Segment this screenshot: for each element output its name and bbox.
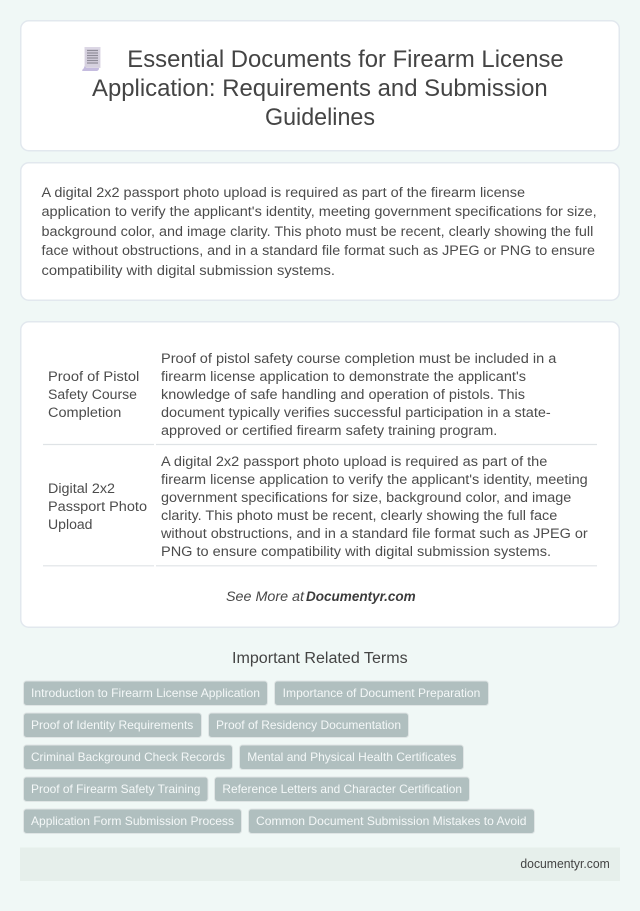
text block: introduction paragraph: A digital 2x2 passport photo upload is required as part of the firearm license	[42, 184, 525, 200]
related terms tags	[24, 681, 534, 834]
row label: pistol safety course	[48, 368, 139, 420]
tag: reference letters: Reference Letters and Character Certification	[222, 782, 462, 796]
heading: Application: Requirements and Submission	[92, 76, 548, 102]
icon: document scroll	[82, 47, 100, 71]
panel: introduction	[21, 163, 619, 300]
text block: introduction paragraph	[42, 184, 597, 278]
row label: pistol safety course: Completion	[48, 404, 121, 420]
tag: introduction: Introduction to Firearm License Application	[31, 686, 260, 700]
tag: residency	[208, 713, 408, 738]
tag: introduction	[24, 681, 268, 706]
footer	[20, 848, 620, 881]
row description: passport photo: A digital 2x2 passport photo upload is required as part of the	[161, 453, 547, 469]
row description: pistol safety course: document typically verifies successful participation in a state-	[161, 404, 551, 420]
tag: importance	[274, 681, 488, 706]
row description: passport photo: government specifications for size, background color, and image	[161, 489, 571, 505]
row description: pistol safety course: knowledge of safe handling and operation of pistols. This	[161, 386, 525, 402]
row description: passport photo: clarity. This photo must be recent, clearly showing the full face	[161, 507, 557, 523]
row description: pistol safety course: Proof of pistol safety course completion must be included in a	[161, 350, 556, 366]
text block: introduction paragraph: compatibility with digital submission systems.	[42, 262, 335, 278]
text block: introduction paragraph: application to verify the applicant's identity, meeting government specifications for size,	[42, 203, 597, 219]
tag: reference letters	[214, 777, 470, 802]
tag: safety training	[24, 777, 208, 802]
table row: passport photo	[43, 453, 597, 566]
row description: passport photo	[160, 453, 588, 559]
row description: pistol safety course: approved or certified firearm safety training program.	[161, 422, 497, 438]
tag: health certificates: Mental and Physical Health Certificates	[247, 750, 456, 764]
see more link: Documentyr.com	[306, 588, 416, 604]
row description: passport photo: firearm license application to verify the applicant's identity, meeting	[161, 471, 588, 487]
tag: background check	[24, 745, 232, 770]
row label: pistol safety course: Proof of Pistol	[48, 368, 139, 384]
row description: passport photo: PNG to ensure compatibility with digital submission systems.	[161, 543, 551, 559]
tag: health certificates	[240, 745, 464, 770]
tag: application form	[24, 809, 242, 834]
text block: introduction paragraph: background color, and image clarity. This photo must be recent, clearly showing the full	[42, 223, 593, 239]
row description: pistol safety course	[161, 350, 556, 438]
text block: introduction paragraph: face without obstructions, and in a standard file format such as JPEG or PNG to ensure	[42, 242, 595, 258]
tag: residency: Proof of Residency Documentation	[216, 718, 401, 732]
see more link	[226, 588, 416, 604]
heading	[92, 47, 564, 131]
heading: Guidelines	[265, 105, 375, 131]
heading: Essential Documents for Firearm License	[127, 47, 564, 73]
footer: documentyr.com	[520, 857, 610, 871]
tag: application form: Application Form Submission Process	[31, 814, 234, 828]
tag: safety training: Proof of Firearm Safety Training	[31, 782, 200, 796]
tag: background check: Criminal Background Check Records	[31, 750, 225, 764]
heading: important related terms: Important Related Terms	[232, 650, 408, 667]
table row: pistol safety course	[43, 350, 597, 444]
tag: common mistakes	[248, 809, 534, 834]
row label: passport photo: Digital 2x2	[48, 480, 115, 496]
row label: passport photo: Passport Photo	[48, 498, 147, 514]
row label: passport photo	[48, 480, 147, 532]
panel: title	[21, 21, 619, 151]
tag: identity	[24, 713, 202, 738]
row description: passport photo: without obstructions, and in a standard file format such as JPEG or	[160, 525, 588, 541]
row description: pistol safety course: firearm license application to demonstrate the applicant's	[161, 368, 526, 384]
see more link: See More at	[226, 588, 305, 604]
tag: common mistakes: Common Document Submission Mistakes to Avoid	[256, 814, 526, 828]
tag: identity: Proof of Identity Requirements	[31, 718, 193, 732]
row label: passport photo: Upload	[48, 516, 92, 532]
row label: pistol safety course: Safety Course	[48, 386, 137, 402]
tag: importance: Importance of Document Preparation	[283, 686, 480, 700]
panel: document table	[21, 322, 619, 627]
